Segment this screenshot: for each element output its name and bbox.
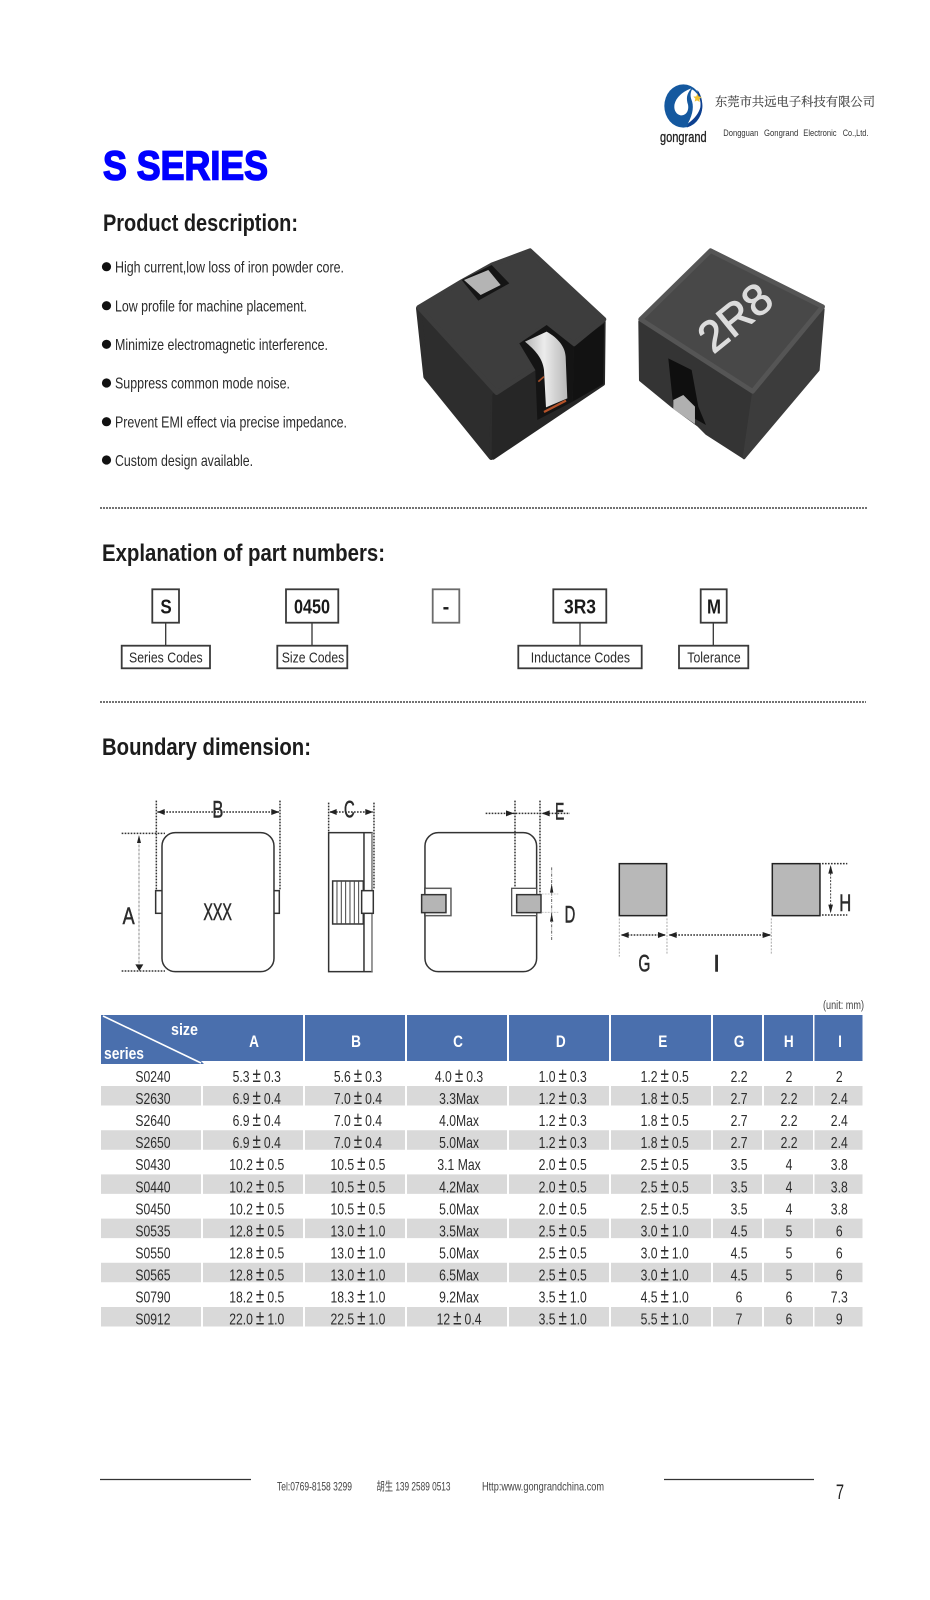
row S2650: 5.0Max bbox=[439, 1134, 479, 1153]
side view with dimension C: C bbox=[344, 797, 355, 824]
row S0550: 13.0 ± 1.0 bbox=[330, 1240, 386, 1263]
table header: H bbox=[784, 1033, 794, 1051]
row S0430: 10.5 ± 0.5 bbox=[330, 1152, 386, 1175]
row S2650: 1.2 ± 0.3 bbox=[539, 1130, 587, 1153]
row S0565 bbox=[135, 1262, 843, 1285]
row S0240: 1.2 ± 0.5 bbox=[641, 1064, 689, 1087]
row S0440: 2.0 ± 0.5 bbox=[539, 1174, 587, 1197]
row S0240: 5.6 ± 0.3 bbox=[334, 1064, 382, 1087]
row S0430: 2.5 ± 0.5 bbox=[641, 1152, 689, 1175]
bullet 5: Prevent EMI effect via precise impedance. bbox=[115, 414, 347, 431]
row S0240: 2 bbox=[836, 1068, 843, 1087]
row S2630: 6.9 ± 0.4 bbox=[233, 1086, 281, 1109]
row S2630: 2.2 bbox=[781, 1090, 798, 1109]
dash separator: - bbox=[443, 596, 449, 618]
page number: 7 bbox=[836, 1480, 844, 1504]
row S0790: 6 bbox=[786, 1289, 792, 1307]
bottom view terminal with dimensions D and E bbox=[486, 798, 575, 940]
row S2640 bbox=[135, 1108, 848, 1131]
table header: I bbox=[838, 1033, 842, 1051]
inductance code bbox=[518, 589, 642, 668]
row S0450: 2.5 ± 0.5 bbox=[641, 1196, 689, 1219]
bullet 6: Custom design available. bbox=[115, 453, 253, 470]
row S2640: 7.0 ± 0.4 bbox=[334, 1108, 382, 1131]
table body bbox=[135, 1064, 848, 1329]
bottom view terminal with dimensions D and E: D bbox=[565, 902, 575, 929]
front view with dimensions A and B bbox=[122, 797, 280, 972]
tolerance code: Tolerance bbox=[687, 650, 741, 667]
bottom view terminal with dimensions D and E: E bbox=[555, 798, 564, 825]
table header: A bbox=[249, 1033, 259, 1051]
bullet 4: Suppress common mode noise. bbox=[115, 376, 290, 393]
row S2630: 7.0 ± 0.4 bbox=[334, 1086, 382, 1109]
row S0912: 5.5 ± 1.0 bbox=[641, 1306, 689, 1329]
row S2640: 2.7 bbox=[731, 1112, 748, 1131]
product photo: two inductors bbox=[419, 251, 823, 458]
company name in English: Dongguan bbox=[723, 128, 758, 139]
row S0430: 3.8 bbox=[831, 1157, 848, 1175]
company name in English bbox=[723, 128, 868, 139]
row S0790: 9.2Max bbox=[439, 1289, 479, 1307]
footer website: Http:www.gongrandchina.com bbox=[482, 1480, 604, 1494]
row S0550: 3.0 ± 1.0 bbox=[641, 1240, 689, 1263]
row S0440: 4 bbox=[786, 1179, 792, 1197]
inductance code: 3R3 bbox=[564, 596, 596, 618]
row S0450: 4 bbox=[786, 1201, 792, 1219]
row S0565: S0565 bbox=[135, 1267, 171, 1285]
table: dimensions by series bbox=[101, 1015, 862, 1329]
row S0430: 3.1 Max bbox=[437, 1157, 481, 1175]
row S0440: 10.5 ± 0.5 bbox=[330, 1174, 386, 1197]
row S0535: 5 bbox=[786, 1223, 792, 1241]
row S0450: 5.0Max bbox=[439, 1201, 479, 1219]
table header: E bbox=[658, 1033, 667, 1051]
row S0790: 7.3 bbox=[831, 1289, 848, 1307]
row S0912: S0912 bbox=[135, 1311, 171, 1329]
row S2640: 2.2 bbox=[781, 1112, 798, 1131]
row S0912: 22.0 ± 1.0 bbox=[229, 1306, 284, 1329]
table header: B bbox=[351, 1033, 361, 1051]
row S0430: 10.2 ± 0.5 bbox=[229, 1152, 284, 1175]
dimension drawing: top and side views bbox=[122, 797, 537, 972]
part number diagram bbox=[122, 589, 748, 668]
row S2650: 2.4 bbox=[831, 1134, 848, 1153]
row S0790 bbox=[135, 1284, 848, 1307]
row S0535: 2.5 ± 0.5 bbox=[539, 1218, 587, 1241]
front view with dimensions A and B: A bbox=[123, 903, 135, 930]
row S0912: 7 bbox=[736, 1311, 742, 1329]
row S2650: 2.2 bbox=[781, 1134, 798, 1153]
dimension drawing: terminal and footprint bbox=[486, 798, 851, 978]
row S0550: 5.0Max bbox=[439, 1245, 479, 1263]
table header: size bbox=[171, 1020, 198, 1039]
front view with dimensions A and B: XXX bbox=[203, 899, 232, 926]
row S0550: 5 bbox=[786, 1245, 792, 1263]
row S0440: 3.8 bbox=[831, 1179, 848, 1197]
company name in English: Co.,Ltd. bbox=[843, 128, 868, 139]
row S0565: 6 bbox=[836, 1267, 843, 1285]
row S0550: 6 bbox=[836, 1245, 843, 1263]
row S0240 bbox=[135, 1064, 843, 1087]
row S2650: 7.0 ± 0.4 bbox=[334, 1130, 382, 1153]
row S0240: 4.0 ± 0.3 bbox=[435, 1064, 483, 1087]
icon: gongrand globe logo: gongrand bbox=[660, 130, 707, 146]
size code: 0450 bbox=[294, 596, 330, 618]
row S0440: 4.2Max bbox=[439, 1179, 479, 1197]
row S0535: 13.0 ± 1.0 bbox=[330, 1218, 386, 1241]
bullet 1: High current,low loss of iron powder core. bbox=[115, 260, 344, 277]
row S0440: S0440 bbox=[135, 1179, 171, 1197]
title: S SERIES bbox=[103, 142, 268, 188]
table header bbox=[101, 1015, 862, 1064]
footprint pads with dimensions G, I, H: I bbox=[713, 951, 720, 978]
row S2630: 3.3Max bbox=[439, 1090, 479, 1109]
row S2640: S2640 bbox=[135, 1112, 171, 1131]
row S0430: 2.0 ± 0.5 bbox=[539, 1152, 587, 1175]
row S0790: 6 bbox=[736, 1289, 742, 1307]
right inductor bbox=[640, 251, 823, 458]
company name in Chinese: 东莞市共远电子科技有限公司 bbox=[715, 94, 875, 109]
series code: S bbox=[160, 595, 172, 618]
row S0440 bbox=[135, 1174, 848, 1197]
row S0240: 5.3 ± 0.3 bbox=[233, 1064, 281, 1087]
row S0430: S0430 bbox=[135, 1157, 171, 1175]
row S0430 bbox=[135, 1152, 848, 1175]
row S2640: 1.8 ± 0.5 bbox=[641, 1108, 689, 1131]
side view with dimension C bbox=[329, 797, 374, 972]
row S0550: 2.5 ± 0.5 bbox=[539, 1240, 587, 1263]
footer telephone: Tel:0769-8158 3299 bbox=[277, 1480, 352, 1494]
row S0430: 4 bbox=[786, 1157, 792, 1175]
series code: Series Codes bbox=[129, 650, 203, 667]
row S0912 bbox=[135, 1306, 843, 1329]
icon: gongrand globe logo bbox=[660, 84, 707, 146]
row S0535: 3.0 ± 1.0 bbox=[641, 1218, 689, 1241]
heading: product description: Product description: bbox=[103, 210, 298, 237]
row S0535: 6 bbox=[836, 1223, 843, 1241]
row S2630: 1.2 ± 0.3 bbox=[539, 1086, 587, 1109]
row S0440: 10.2 ± 0.5 bbox=[229, 1174, 284, 1197]
row S2630: 1.8 ± 0.5 bbox=[641, 1086, 689, 1109]
row S0565: 2.5 ± 0.5 bbox=[539, 1262, 587, 1285]
row S0912: 22.5 ± 1.0 bbox=[330, 1306, 386, 1329]
series code bbox=[122, 589, 210, 668]
size code bbox=[277, 589, 347, 668]
table header: G bbox=[734, 1033, 744, 1051]
row S2630 bbox=[135, 1086, 848, 1109]
row S0430: 3.5 bbox=[731, 1157, 748, 1175]
row S0240: 1.0 ± 0.3 bbox=[539, 1064, 587, 1087]
company name in English: Gongrand bbox=[764, 128, 798, 139]
left inductor bbox=[419, 251, 604, 458]
table header: series bbox=[104, 1044, 144, 1063]
heading: boundary dimension: Boundary dimension: bbox=[102, 734, 311, 761]
row S0565: 6.5Max bbox=[439, 1267, 479, 1285]
row S0450: S0450 bbox=[135, 1201, 171, 1219]
table header: C bbox=[453, 1033, 463, 1051]
row S0450: 10.2 ± 0.5 bbox=[229, 1196, 284, 1219]
row S0450: 2.0 ± 0.5 bbox=[539, 1196, 587, 1219]
inductance code: Inductance Codes bbox=[531, 650, 630, 667]
row S0535: 12.8 ± 0.5 bbox=[229, 1218, 284, 1241]
row S2650: 6.9 ± 0.4 bbox=[233, 1130, 281, 1153]
dash separator bbox=[433, 589, 459, 623]
row S0565: 3.0 ± 1.0 bbox=[641, 1262, 689, 1285]
row S0450: 3.5 bbox=[731, 1201, 748, 1219]
row S0912: 3.5 ± 1.0 bbox=[539, 1306, 587, 1329]
row S2640: 4.0Max bbox=[439, 1112, 479, 1131]
row S0565: 5 bbox=[786, 1267, 792, 1285]
row S2650: 2.7 bbox=[731, 1134, 748, 1153]
row S0535: 4.5 bbox=[731, 1223, 748, 1241]
row S0450 bbox=[135, 1196, 848, 1219]
row S0550: 4.5 bbox=[731, 1245, 748, 1263]
footprint pads with dimensions G, I, H bbox=[619, 864, 851, 978]
row S0565: 12.8 ± 0.5 bbox=[229, 1262, 284, 1285]
bullet 3: Minimize electromagnetic interference. bbox=[115, 337, 328, 354]
row S0240: 2.2 bbox=[731, 1068, 748, 1087]
footer bbox=[100, 1480, 844, 1504]
row S2650 bbox=[135, 1130, 848, 1153]
bottom view, left part bbox=[422, 833, 537, 972]
table header: D bbox=[556, 1033, 566, 1051]
row S2630: 2.4 bbox=[831, 1090, 848, 1109]
row S0535: S0535 bbox=[135, 1223, 171, 1241]
row S0535: 3.5Max bbox=[439, 1223, 479, 1241]
tolerance code: M bbox=[707, 596, 721, 618]
row S2640: 1.2 ± 0.3 bbox=[539, 1108, 587, 1131]
row S0550: 12.8 ± 0.5 bbox=[229, 1240, 284, 1263]
alternating row shading bbox=[101, 1086, 862, 1326]
row S0550: S0550 bbox=[135, 1245, 171, 1263]
row S0450: 10.5 ± 0.5 bbox=[330, 1196, 386, 1219]
row S0790: S0790 bbox=[135, 1289, 171, 1307]
footprint pads with dimensions G, I, H: H bbox=[839, 890, 851, 917]
row S2630: S2630 bbox=[135, 1090, 171, 1109]
row S0535 bbox=[135, 1218, 843, 1241]
row S0912: 6 bbox=[786, 1311, 792, 1329]
row S0790: 3.5 ± 1.0 bbox=[539, 1284, 587, 1307]
row S0565: 13.0 ± 1.0 bbox=[330, 1262, 386, 1285]
footer mobile: 胡生 139 2589 0513 bbox=[376, 1480, 451, 1494]
row S0790: 18.3 ± 1.0 bbox=[330, 1284, 386, 1307]
row S2650: S2650 bbox=[135, 1134, 171, 1153]
row S2650: 1.8 ± 0.5 bbox=[641, 1130, 689, 1153]
row S0240: S0240 bbox=[135, 1068, 171, 1087]
company name in English: Electronic bbox=[803, 128, 837, 139]
row S0440: 2.5 ± 0.5 bbox=[641, 1174, 689, 1197]
row S2640: 6.9 ± 0.4 bbox=[233, 1108, 281, 1131]
part marking: 2R8 bbox=[689, 274, 782, 362]
front view with dimensions A and B: B bbox=[212, 797, 223, 824]
row S0240: 2 bbox=[786, 1068, 792, 1087]
heading: explanation of part numbers: Explanation of part numbers: bbox=[102, 540, 385, 567]
row S0440: 3.5 bbox=[731, 1179, 748, 1197]
unit note: (unit: mm) bbox=[823, 1000, 864, 1012]
row S0450: 3.8 bbox=[831, 1201, 848, 1219]
row S0790: 18.2 ± 0.5 bbox=[229, 1284, 284, 1307]
row S0565: 4.5 bbox=[731, 1267, 748, 1285]
row S0912: 9 bbox=[836, 1311, 843, 1329]
divider bbox=[100, 701, 866, 703]
row S2640: 2.4 bbox=[831, 1112, 848, 1131]
row S0912: 12 ± 0.4 bbox=[437, 1306, 482, 1329]
size code: Size Codes bbox=[282, 650, 344, 667]
bullet 2: Low profile for machine placement. bbox=[115, 299, 307, 316]
row S0790: 4.5 ± 1.0 bbox=[641, 1284, 689, 1307]
logo and company name bbox=[660, 84, 875, 146]
row S0550 bbox=[135, 1240, 843, 1263]
footprint pads with dimensions G, I, H: G bbox=[638, 951, 650, 978]
tolerance code bbox=[679, 589, 748, 668]
row S2630: 2.7 bbox=[731, 1090, 748, 1109]
divider bbox=[100, 507, 868, 509]
feature list bbox=[102, 260, 347, 470]
